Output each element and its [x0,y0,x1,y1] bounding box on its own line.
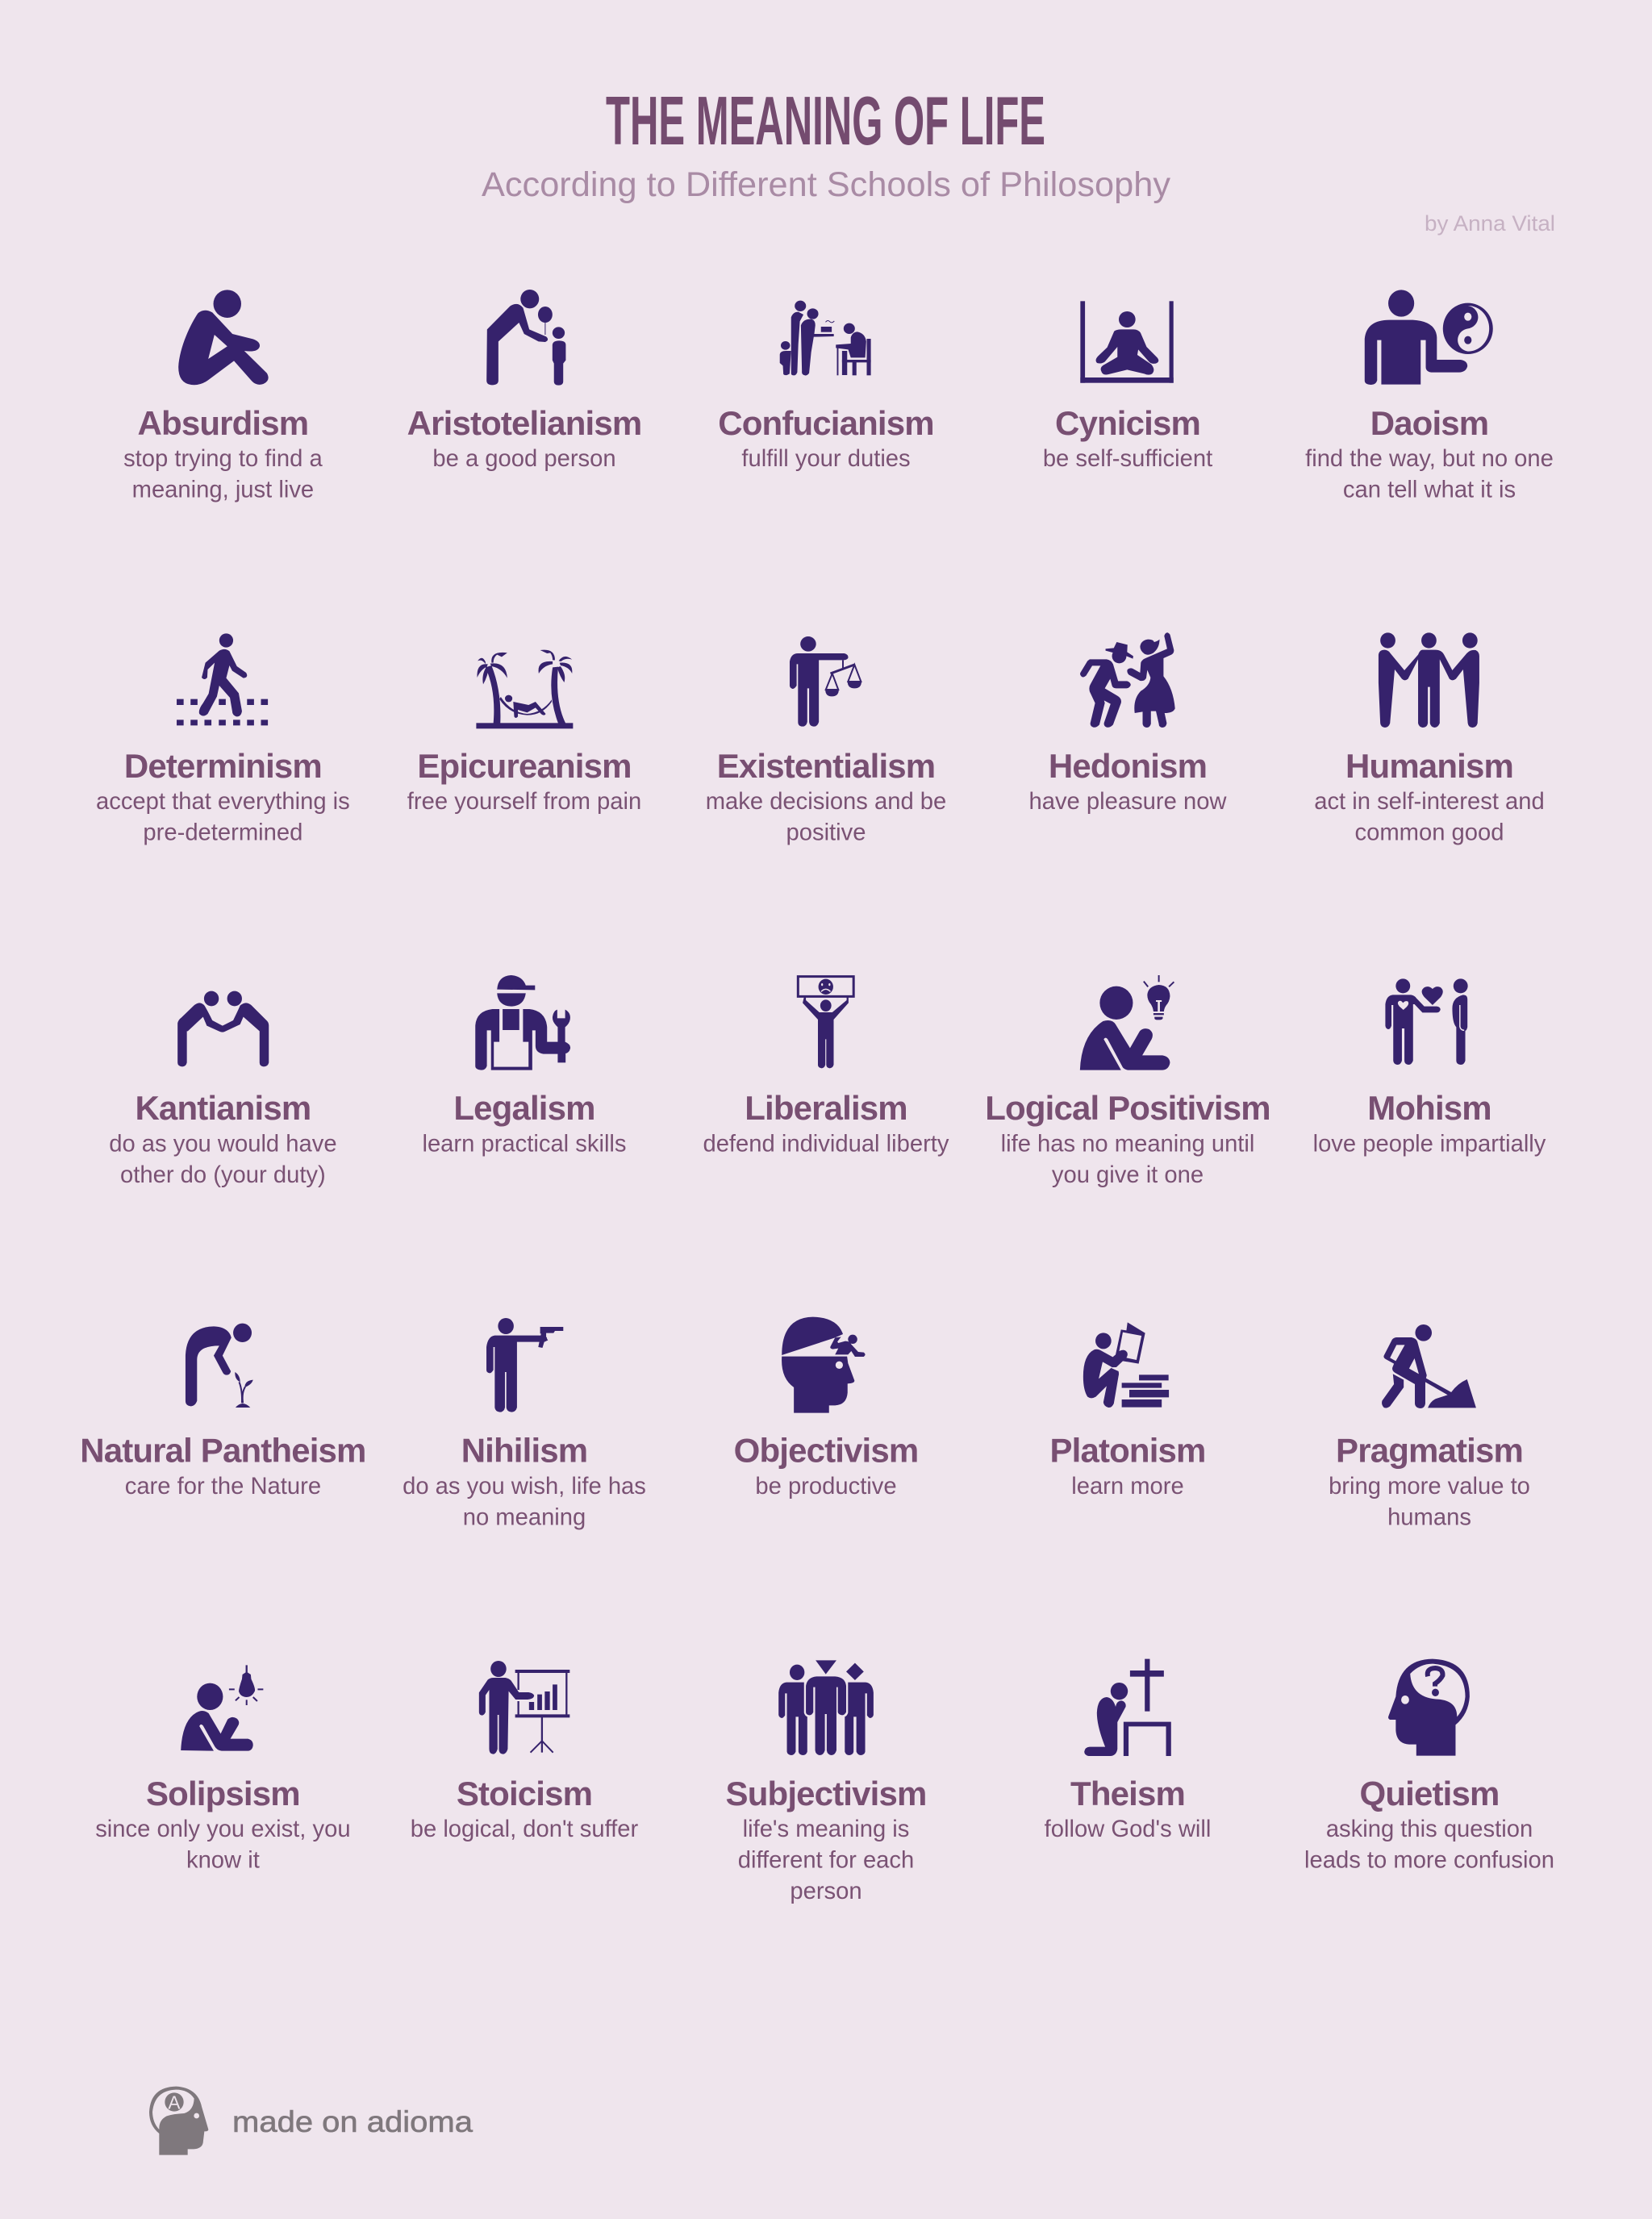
panel: Existentialism [706,636,946,845]
description: stop trying to find a [123,446,323,472]
heading: Daoism [1370,404,1488,442]
description: life's meaning is [743,1816,909,1842]
description: be self-sufficient [1043,446,1212,472]
panel: Quietism [1304,1659,1554,1873]
panel: Solipsism [95,1665,351,1873]
byline: by Anna Vital [1425,211,1555,236]
description: no meaning [463,1505,586,1531]
icon: presenter with bar chart board [479,1661,569,1754]
heading: Cynicism [1055,404,1200,442]
title: THE MEANING OF LIFE [606,83,1045,160]
description: defend individual liberty [703,1131,949,1157]
description: be a good person [432,446,616,472]
description: follow God's will [1045,1816,1211,1842]
icon: adioma head logo: A [168,2092,181,2113]
description: be logical, don't suffer [411,1816,639,1842]
panel: Logical Positivism [985,975,1270,1188]
description: different for each [738,1847,914,1873]
description: positive [786,820,866,845]
icon: person offering a heart [1385,978,1468,1065]
heading: Stoicism [457,1775,592,1812]
icon: three people holding hands [1379,632,1479,728]
panel: Hedonism [1028,632,1227,815]
icon: person with child and balloon [486,290,565,386]
description: life has no meaning until [1001,1131,1254,1157]
description: know it [186,1847,260,1873]
description: fulfill your duties [741,446,911,472]
icon: person pointing a gun [486,1318,563,1412]
icon: family serving a meal [780,301,871,375]
heading: Quietism [1360,1775,1499,1812]
heading: Platonism [1049,1431,1206,1470]
heading: Subjectivism [726,1775,926,1812]
icon: person shoveling [1382,1324,1476,1408]
heading: Mohism [1367,1089,1491,1127]
description: person [790,1879,862,1904]
icon: two people joining hands [177,991,269,1066]
subtitle: According to Different Schools of Philosophy [482,165,1170,204]
description: accept that everything is [96,789,350,815]
description: learn practical skills [422,1131,627,1157]
heading: Legalism [453,1089,595,1127]
description: bring more value to [1329,1474,1530,1499]
panel: Nihilism [403,1318,646,1531]
icon: worker with wrench [475,975,570,1070]
heading: Absurdism [138,404,308,442]
panel: Kantianism [109,991,337,1188]
heading: Kantianism [135,1089,311,1127]
icon: head with question mark [1388,1659,1470,1756]
panel: Humanism [1314,632,1545,845]
heading: Humanism [1345,747,1513,785]
description: pre-determined [143,820,302,845]
description: make decisions and be [706,789,946,815]
description: do as you wish, life has [403,1474,646,1499]
icon: sitting figure [178,290,269,385]
panel: Stoicism [411,1661,639,1842]
description: be productive [755,1474,897,1499]
heading: Objectivism [734,1431,918,1470]
description: since only you exist, you [95,1816,351,1842]
icon: hammock between palm trees [476,650,573,728]
description: care for the Nature [125,1474,321,1499]
heading: Pragmatism [1336,1431,1523,1470]
description: love people impartially [1313,1131,1546,1157]
footer text: made on adioma [232,2105,473,2138]
icon: person walking on a dotted path [177,633,268,725]
icon: person holding scales [790,636,861,727]
heading: Determinism [124,747,322,785]
icon: seated person with light bulb [1080,975,1174,1070]
description: other do (your duty) [120,1162,326,1188]
icon: seated person under a bulb [181,1665,263,1751]
icon: dancing couple [1080,632,1175,728]
panel: Mohism [1313,978,1546,1157]
panel: Liberalism [703,977,949,1157]
description: have pleasure now [1028,789,1227,815]
icon: three people with different symbols [778,1660,874,1755]
panel: Daoism [1305,290,1554,503]
icon: person holding a sign [798,977,853,1068]
panel: Theism [1045,1659,1211,1842]
panel: Cynicism [1043,301,1212,472]
panel: Determinism [96,633,350,845]
description: act in self-interest and [1314,789,1545,815]
icon: adioma head logo [149,2087,208,2155]
panel: Subjectivism [726,1660,926,1904]
description: leads to more confusion [1304,1847,1554,1873]
heading: Solipsism [146,1775,300,1812]
panel: Pragmatism [1329,1324,1530,1531]
panel: Epicureanism [407,650,641,815]
icon: person bending over a sprout [186,1324,253,1408]
description: learn more [1071,1474,1184,1499]
description: common good [1355,820,1504,845]
description: find the way, but no one [1305,446,1554,472]
icon: reading person with book stack [1083,1322,1169,1408]
panel: Absurdism [123,290,323,503]
heading: Theism [1070,1775,1185,1812]
icon: head opened with small figure [782,1317,866,1413]
panel: Confucianism [718,301,934,472]
heading: Aristotelianism [407,404,641,442]
description: asking this question [1326,1816,1533,1842]
description: humans [1387,1505,1471,1531]
description: meaning, just live [132,478,314,503]
heading: Liberalism [745,1089,907,1127]
icon: person kneeling at a cross [1084,1659,1171,1756]
heading: Existentialism [717,747,935,785]
heading: Logical Positivism [985,1089,1270,1127]
heading: Confucianism [718,404,934,442]
description: do as you would have [109,1131,337,1157]
heading: Nihilism [461,1431,587,1470]
panel: Legalism [422,975,627,1157]
icon: person holding yin-yang [1365,290,1493,385]
panel: Aristotelianism [407,290,641,472]
panel: Natural Pantheism [80,1324,366,1499]
panel: Platonism [1049,1322,1206,1499]
panel: Objectivism [734,1317,918,1499]
heading: Hedonism [1049,747,1207,785]
description: can tell what it is [1343,478,1516,503]
description: free yourself from pain [407,789,641,815]
heading: Epicureanism [417,747,632,785]
heading: Natural Pantheism [80,1431,366,1470]
footer logo: made on adioma [149,2087,473,2155]
description: you give it one [1052,1162,1204,1188]
icon: meditating figure in a box [1080,301,1174,383]
